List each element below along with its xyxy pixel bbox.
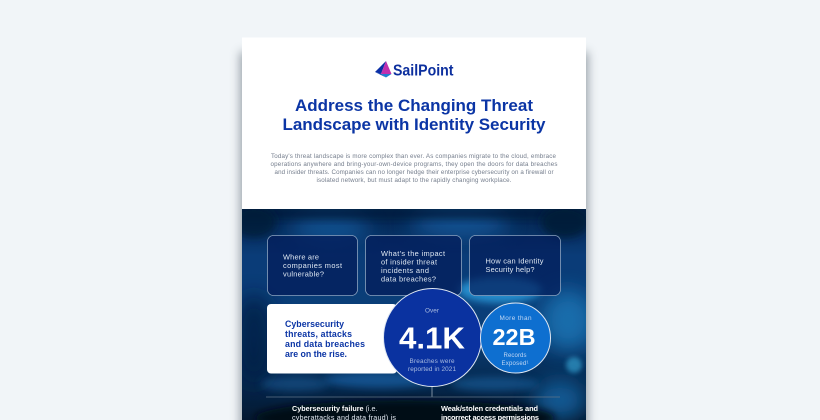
intro paragraph: Today's threat landscape is more complex than ever. As companies migrate to the cloud, embrace <box>271 153 557 160</box>
question card 1: vulnerable? <box>283 270 324 278</box>
callout: rising threats: threats, attacks <box>285 329 352 339</box>
intro paragraph: isolated network, but must adapt to the rapidly changing workplace. <box>316 177 512 184</box>
question card 1 <box>268 236 358 296</box>
callout: rising threats <box>267 304 397 374</box>
title: Landscape with Identity Security <box>282 115 546 134</box>
question card 1: Where are <box>283 252 319 262</box>
logo wordmark: SailPoint <box>393 62 454 80</box>
question card 1: companies most <box>283 261 342 270</box>
question card 3 <box>470 236 560 296</box>
title: Address the Changing Threat <box>295 96 533 115</box>
text: cybersecurity failure <box>292 404 396 420</box>
title <box>282 96 546 134</box>
text: weak credentials: Weak/stolen credentials and <box>441 404 538 413</box>
question card 3: Security help? <box>486 265 534 274</box>
intro paragraph: operations anywhere and bring-your-own-device programs, they open the doors for data breaches <box>270 161 558 168</box>
question card 2: data breaches? <box>381 274 436 284</box>
text: cybersecurity failure: Cybersecurity failure (i.e. <box>292 404 378 413</box>
text: weak credentials <box>441 404 539 420</box>
stat circle: 22B records: 22B <box>492 324 536 350</box>
stat circle: 4.1K breaches: Breaches were <box>410 358 455 365</box>
callout: rising threats: and data breaches <box>285 339 365 349</box>
stat circle: 4.1K breaches: Over <box>425 308 440 314</box>
connector line <box>266 386 560 397</box>
panel: dark bokeh section <box>232 206 594 420</box>
intro paragraph <box>270 153 558 184</box>
card shadow <box>240 52 588 420</box>
logo: SailPoint <box>375 61 454 80</box>
question card 2: What's the impact <box>381 249 445 258</box>
stat circle: 22B records: More than <box>500 315 532 322</box>
stat circle: 4.1K breaches <box>384 288 482 386</box>
question card 2: incidents and <box>381 266 429 275</box>
stat circle: 22B records: Exposed¹ <box>502 361 528 367</box>
callout: rising threats: are on the rise. <box>285 349 347 359</box>
panel: white header card <box>242 38 586 210</box>
question card 2: of insider threat <box>381 258 437 266</box>
question card 3: How can Identity <box>486 256 544 266</box>
callout: rising threats: Cybersecurity <box>285 319 344 329</box>
stat circle: 22B records: Records <box>504 353 526 359</box>
background glow <box>232 206 594 420</box>
question card 2 <box>366 236 462 296</box>
intro paragraph: and insider threats. Companies can no longer hedge their enterprise cybersecurity on a firewall or <box>274 169 554 176</box>
stat circle: 4.1K breaches: reported in 2021 <box>408 366 456 373</box>
icon: sail <box>375 61 392 78</box>
stat circle: 4.1K breaches: 4.1K <box>399 320 466 356</box>
stat circle: 22B records <box>480 303 550 373</box>
